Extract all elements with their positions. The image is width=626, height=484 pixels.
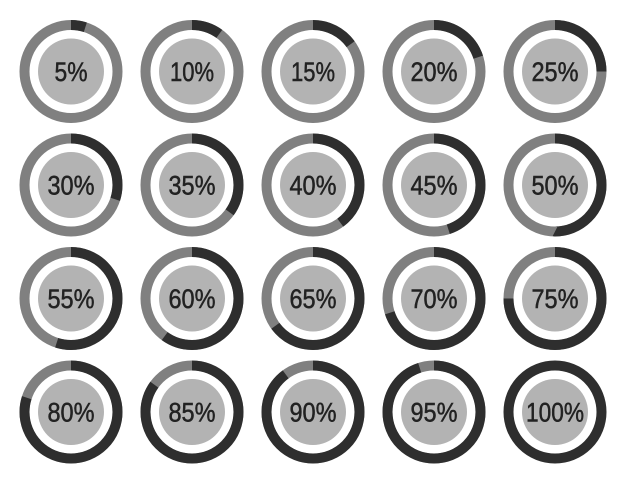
donut: 25%: 25% [532, 57, 578, 87]
donut: 30% [24, 138, 118, 232]
donut: 100% [508, 366, 602, 458]
donut: 45%: 45% [410, 170, 458, 200]
donut: 55%: 55% [48, 284, 94, 314]
donut: 75%: 75% [532, 284, 578, 314]
donut: 35% [146, 138, 238, 232]
donut: 50%: 50% [532, 170, 578, 200]
donut: 15%: 15% [291, 57, 335, 87]
donut: 80%: 80% [48, 398, 94, 428]
donut: 10% [146, 25, 238, 118]
donut: 45% [388, 138, 480, 232]
donut: 20%: 20% [410, 57, 458, 87]
donut: 60% [146, 252, 238, 345]
donut: 75% [508, 252, 602, 345]
donut: 90% [266, 366, 360, 458]
donut: 10%: 10% [170, 57, 214, 87]
donut: 50% [508, 138, 602, 232]
donut: 40%: 40% [290, 170, 336, 200]
donut: 25% [508, 25, 602, 118]
donut: 60%: 60% [168, 284, 216, 314]
donut: 70% [388, 252, 480, 345]
donut: 95%: 95% [410, 398, 458, 428]
donut: 100%: 100% [526, 398, 584, 428]
donut: 15% [266, 25, 360, 118]
donut: 40% [266, 138, 360, 232]
donut: 85% [146, 366, 238, 458]
donut: 70%: 70% [410, 284, 458, 314]
donut: 85%: 85% [168, 398, 216, 428]
donut: 80% [24, 366, 118, 458]
donut: 90%: 90% [290, 398, 336, 428]
donut: 95% [388, 366, 480, 458]
donut: 35%: 35% [168, 170, 216, 200]
donut: 5% [24, 25, 118, 118]
donut: 30%: 30% [48, 170, 94, 200]
donut: 20% [388, 25, 480, 118]
donut: 65% [266, 252, 360, 345]
donut: 55% [24, 252, 118, 345]
donut: 65%: 65% [290, 284, 336, 314]
donut: 5%: 5% [54, 57, 88, 87]
